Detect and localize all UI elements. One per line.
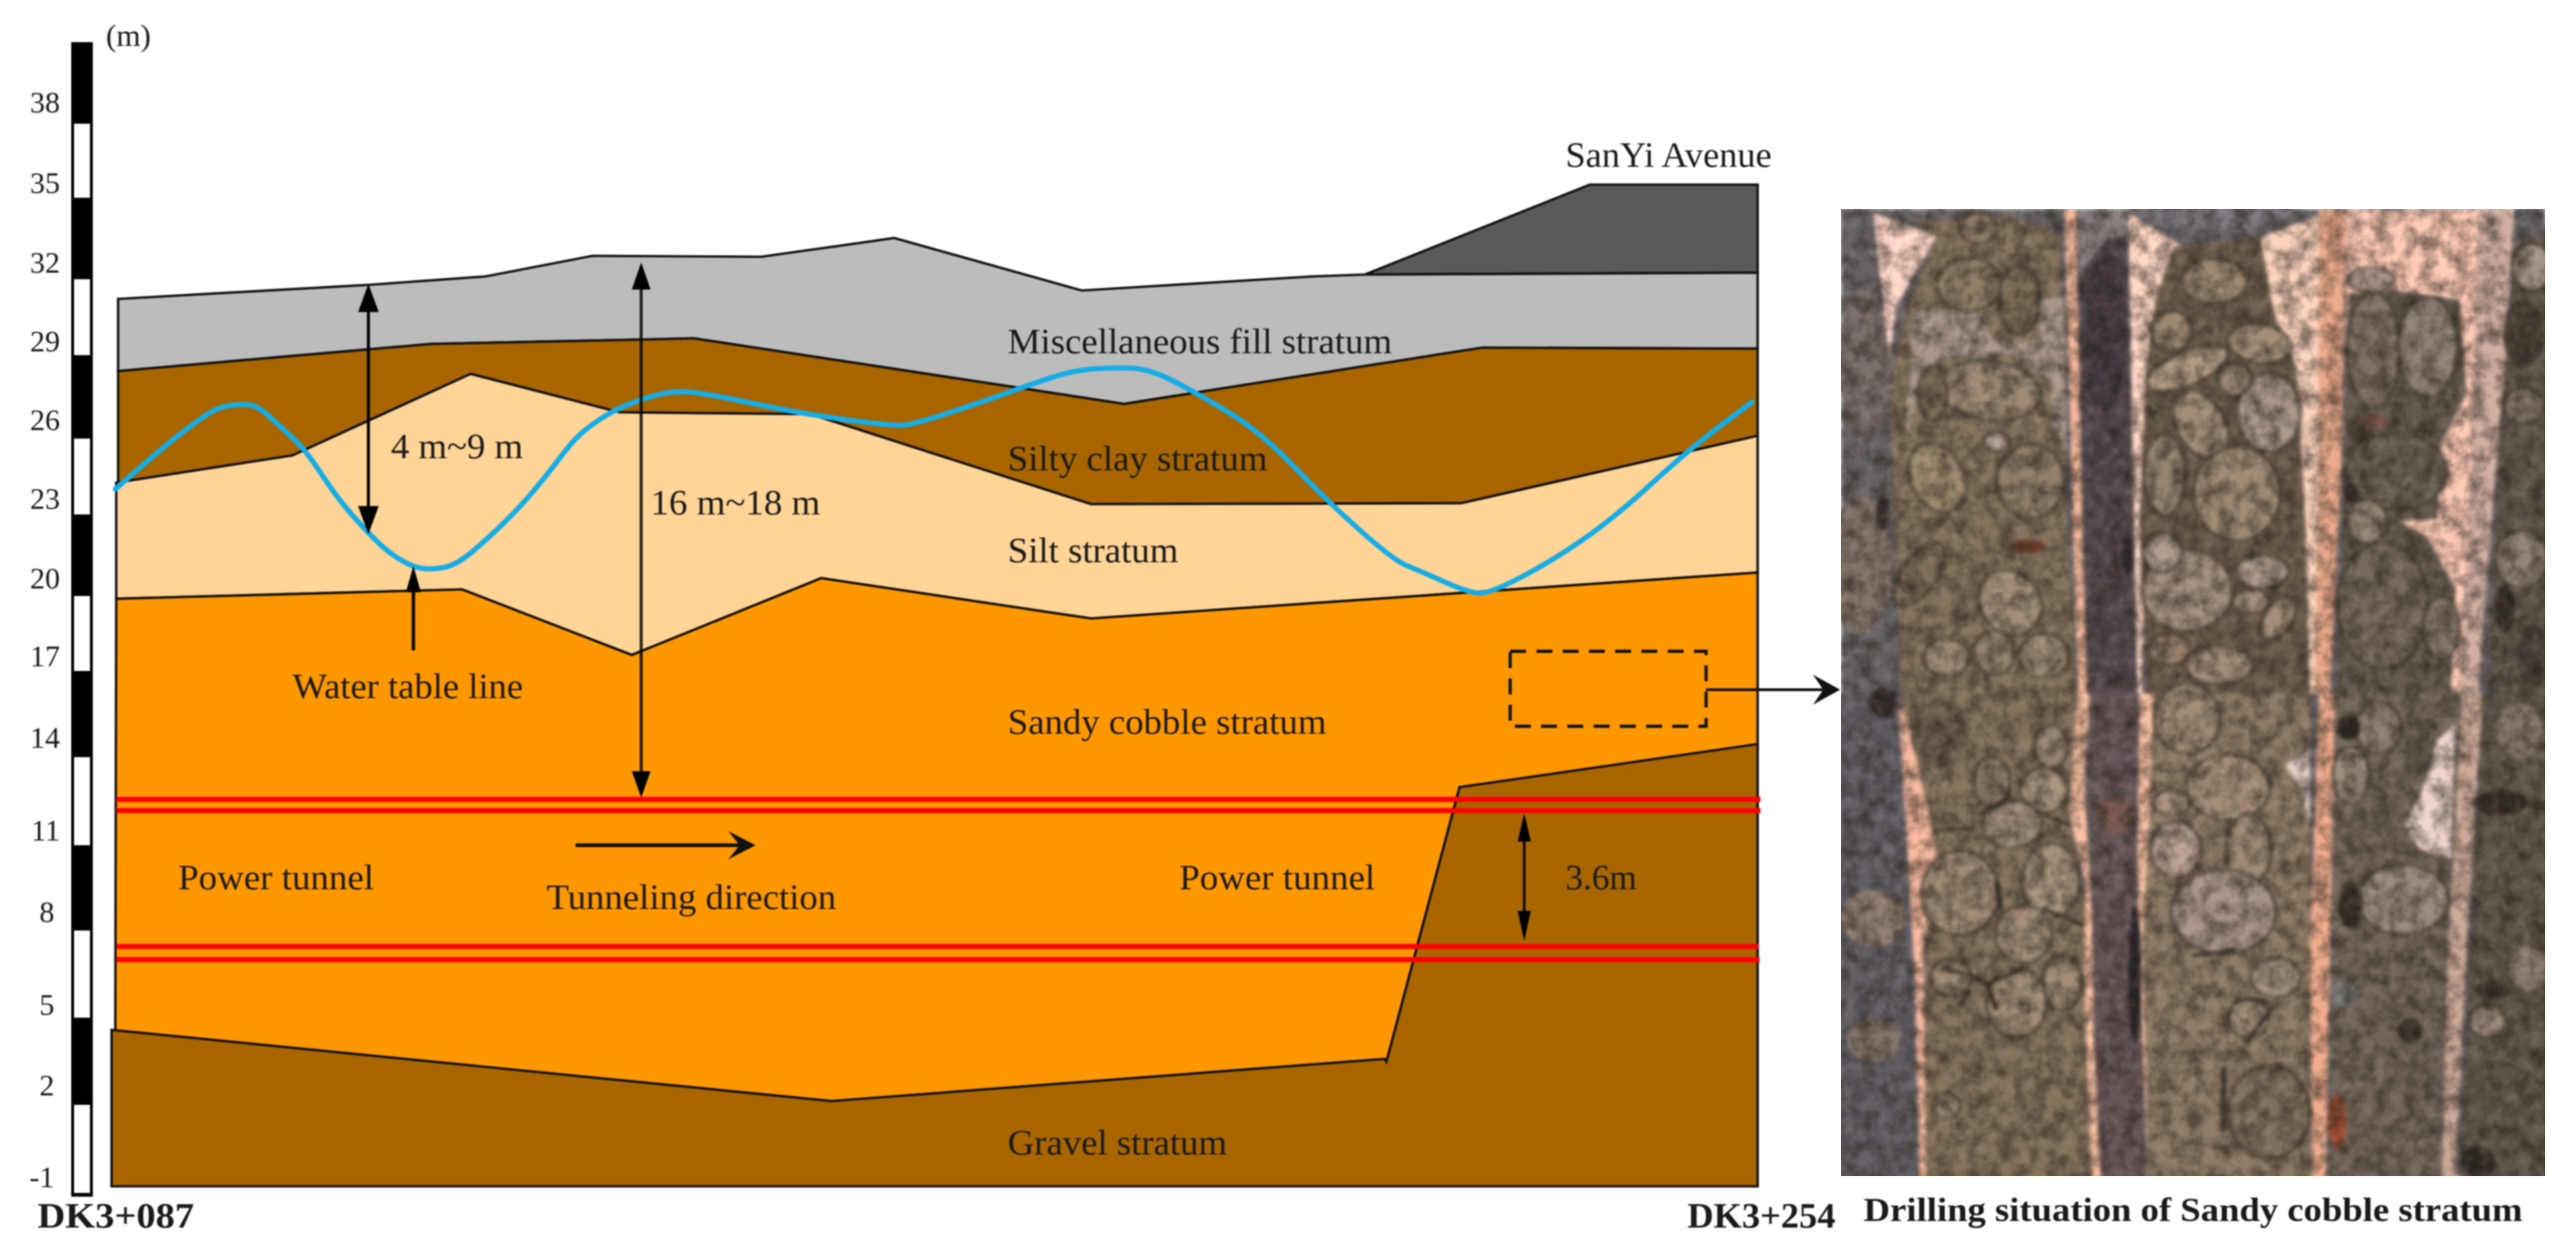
photo top half <box>1828 187 2553 693</box>
elevation numbers: -1 <box>29 1160 54 1194</box>
geological section <box>112 185 1760 1186</box>
photo grain texture light <box>1841 209 2545 1176</box>
label: Power tunnel right: Power tunnel <box>1179 858 1375 898</box>
arrow: 16 m to 18 m depth <box>632 262 651 797</box>
label: Gravel stratum: Gravel stratum <box>1008 1124 1227 1163</box>
elevation numbers: 26 <box>30 403 60 437</box>
label: Power tunnel left: Power tunnel <box>178 858 374 898</box>
elevation numbers: 11 <box>31 813 60 847</box>
water table line <box>115 368 1752 593</box>
scale unit label: (m) <box>106 20 151 53</box>
elevation numbers: 38 <box>30 85 60 119</box>
elevation numbers: 5 <box>39 988 54 1021</box>
stratum: gravel <box>112 744 1758 1186</box>
label: Miscellaneous fill stratum: Miscellaneous fill stratum <box>1008 322 1392 362</box>
arrow: 3.6 m tunnel height <box>1518 813 1531 941</box>
photo bottom half <box>1837 683 2550 1181</box>
elevation numbers: 35 <box>30 166 60 200</box>
elevation numbers: 23 <box>30 482 60 515</box>
label: 4 m~9 m: 4 m~9 m <box>391 427 523 467</box>
stratum: sandy cobble <box>115 573 1758 1101</box>
elevation numbers: 14 <box>30 721 60 754</box>
arrow: 4 m to 9 m depth <box>358 284 379 534</box>
stratum: silt <box>116 374 1758 655</box>
arrow: water table pointer <box>406 566 421 650</box>
stratum: silty clay <box>118 338 1758 504</box>
dashed sample location box <box>1510 651 1706 726</box>
arrow: box to photo <box>1706 675 1840 705</box>
photo caption: Drilling situation of Sandy cobble stratum <box>1864 1191 2523 1229</box>
label: 16 m~18 m: 16 m~18 m <box>651 484 820 523</box>
label: Sandy cobble stratum: Sandy cobble stratum <box>1008 703 1326 742</box>
label: end chainage: DK3+254 <box>1687 1197 1835 1236</box>
elevation numbers: 20 <box>30 561 60 595</box>
label: Silt stratum: Silt stratum <box>1008 531 1178 571</box>
elevation numbers: 29 <box>30 324 60 358</box>
photo grain texture dark <box>1841 209 2545 1176</box>
photo: drilling core samples of sandy cobble <box>1828 187 2553 1181</box>
elevation numbers: 32 <box>30 246 60 279</box>
label: Silty clay stratum: Silty clay stratum <box>1008 439 1267 479</box>
label: Water table line: Water table line <box>292 667 523 707</box>
arrow: tunneling direction <box>576 831 756 859</box>
elevation scale bar <box>71 42 93 1197</box>
elevation numbers <box>29 85 60 1194</box>
stratum: SanYi Avenue road <box>1365 185 1758 275</box>
label: 3.6m: 3.6m <box>1565 858 1637 898</box>
label: SanYi Avenue: SanYi Avenue <box>1565 136 1772 175</box>
label: start chainage: DK3+087 <box>37 1197 194 1236</box>
power tunnel lines <box>116 799 1760 960</box>
elevation numbers: 8 <box>39 895 54 929</box>
elevation numbers: 2 <box>39 1068 54 1102</box>
elevation numbers: 17 <box>30 639 60 673</box>
stratum: miscellaneous fill <box>118 238 1758 404</box>
label: Tunneling direction: Tunneling direction <box>547 878 836 917</box>
